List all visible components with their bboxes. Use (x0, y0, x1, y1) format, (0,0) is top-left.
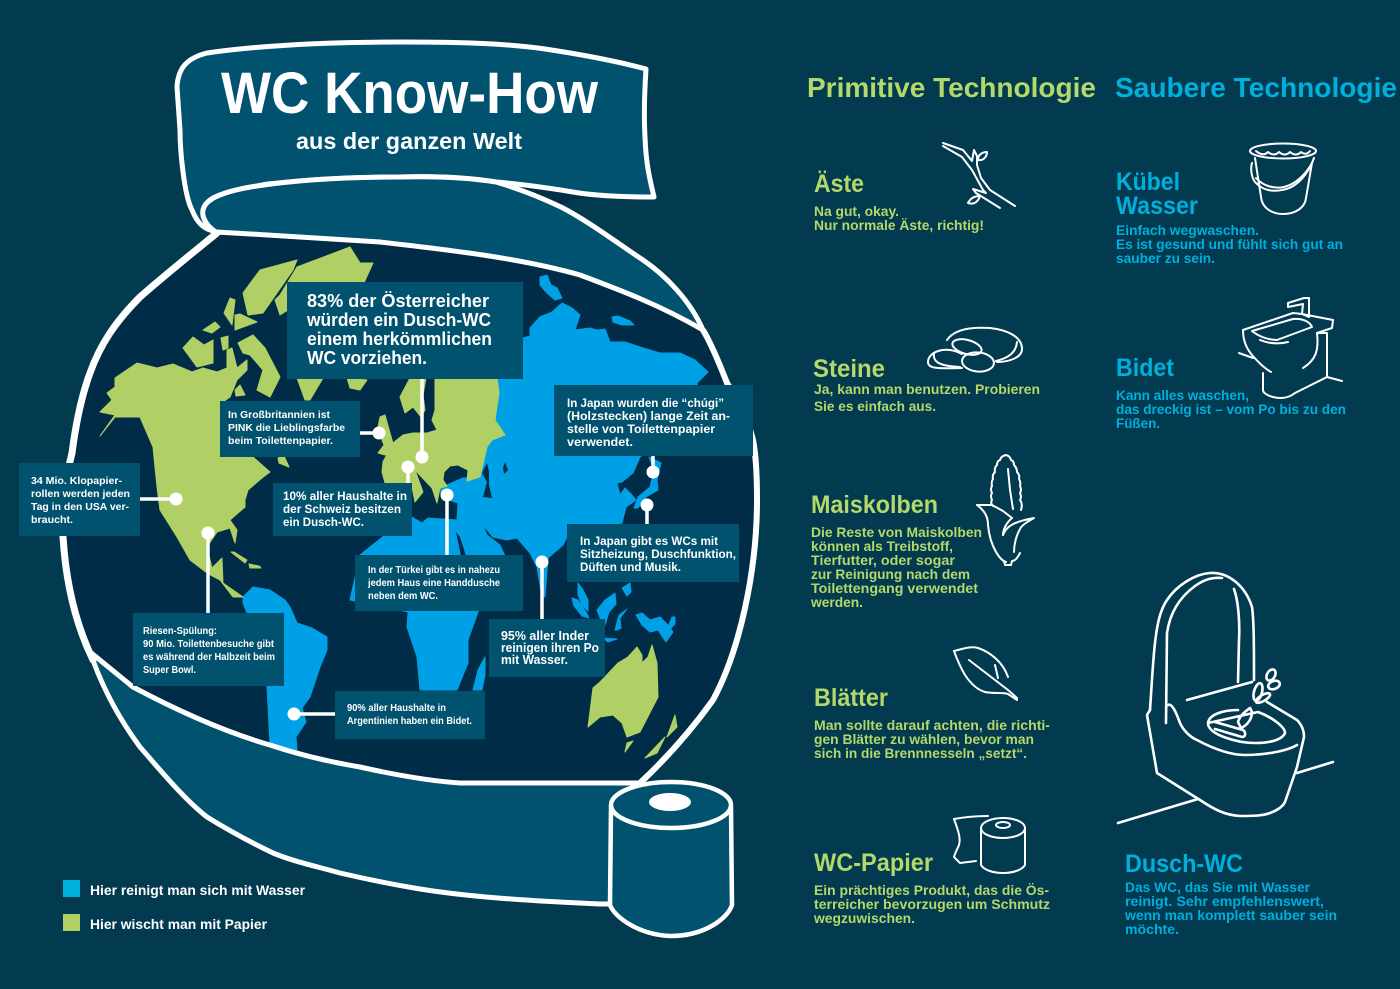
panel: Blätter: Man sollte darauf achten, die richti- (814, 717, 1050, 733)
connector lines and dots (140, 379, 660, 720)
callout: Super Bowl: Super Bowl. (143, 665, 196, 676)
continents: inland seas (456, 462, 508, 556)
panel: Blätter (814, 647, 1050, 761)
panel: Kübel Wasser: Es ist gesund und fühlt sich gut an (1116, 236, 1343, 252)
legend: Hier reinigt man sich mit Wasser (90, 882, 306, 898)
heading: Saubere Technologie: Saubere Technologie (1115, 72, 1397, 103)
panel: Kübel Wasser (1116, 144, 1343, 266)
callout: Super Bowl (133, 613, 284, 686)
callout: Österreich (287, 282, 523, 379)
panel: Bidet: Bidet (1116, 354, 1175, 382)
panel: Blätter: sich in die Brennnesseln „setzt“. (814, 745, 1027, 761)
panel: Bidet: Füßen. (1116, 415, 1160, 431)
callout: Großbritannien (220, 401, 360, 457)
callout: Türkei: neben dem WC. (368, 591, 438, 602)
globe map (63, 233, 757, 783)
panel: Dusch-WC: Dusch-WC (1125, 850, 1243, 878)
globe outline right (640, 330, 757, 783)
callout: Österreich: würden ein Dusch-WC (306, 310, 491, 330)
panel: Maiskolben: werden. (810, 594, 863, 610)
icon: bucket (1250, 144, 1316, 214)
callout: Großbritannien: beim Toilettenpapier. (228, 435, 333, 447)
panel: WC-Papier: WC-Papier (814, 849, 933, 877)
banner shadow (496, 182, 614, 205)
callout: USA: rollen werden jeden (31, 488, 130, 500)
panel: Dusch-WC: reinigt. Sehr empfehlenswert, (1125, 893, 1324, 909)
callout: Österreich: WC vorziehen. (307, 348, 427, 368)
callout: USA: Tag in den USA ver- (31, 501, 129, 513)
continents: water regions (243, 275, 708, 750)
panel: Äste: Äste (814, 170, 864, 198)
panel: Dusch-WC: Das WC, das Sie mit Wasser (1125, 879, 1311, 895)
panel: WC-Papier: Ein prächtiges Produkt, das die Ös- (814, 882, 1049, 898)
panel: Dusch-WC: wenn man komplett sauber sein (1124, 907, 1337, 923)
panel: WC-Papier: wegzuwischen. (813, 910, 915, 926)
callout: Indien: 95% aller Inder (501, 629, 589, 643)
callout: Argentinien (335, 691, 485, 739)
panel: Dusch-WC (1118, 573, 1337, 937)
panel: Kübel Wasser: Einfach wegwaschen. (1116, 222, 1259, 238)
panel: WC-Papier (813, 816, 1050, 926)
panel: Steine: Steine (813, 355, 885, 383)
panel: Kübel Wasser: Kübel (1116, 168, 1180, 196)
callout: Japan chúgi: In Japan wurden die “chúgi” (567, 396, 724, 410)
panel: Dusch-WC: möchte. (1125, 921, 1179, 937)
panel: Bidet: das dreckig ist – vom Po bis zu den (1116, 401, 1346, 417)
panel: Bidet: Kann alles waschen, (1116, 387, 1249, 403)
callout: Japan chúgi: (Holzstecken) lange Zeit an- (567, 409, 730, 423)
callout: Österreich: 83% der Österreicher (307, 291, 489, 311)
callout: Japan WCs (567, 524, 739, 582)
callout: Argentinien: 90% aller Haushalte in (347, 703, 446, 714)
icon: corn (977, 455, 1034, 565)
panel: Steine: Ja, kann man benutzen. Probieren (814, 381, 1040, 397)
panel: Maiskolben (810, 455, 1034, 610)
callout: Super Bowl: es während der Halbzeit beim (143, 652, 275, 663)
callout: Japan chúgi (554, 385, 753, 456)
icon: paper roll (954, 816, 1025, 873)
callout: Indien: mit Wasser. (501, 653, 568, 667)
callout: Österreich: einem herkömmlichen (307, 329, 492, 349)
callout: Türkei: In der Türkei gibt es in nahezu (368, 565, 500, 576)
icon: bidet (1239, 298, 1342, 398)
panel: Steine: Sie es einfach aus. (814, 398, 936, 414)
callout: Schweiz: der Schweiz besitzen (283, 502, 401, 516)
callout: Schweiz (273, 483, 412, 536)
callout: Türkei: jedem Haus eine Handdusche (367, 578, 501, 589)
panel: Bidet (1116, 298, 1346, 431)
panel: Blätter: Blätter (814, 684, 888, 712)
callout: USA (19, 463, 140, 536)
callout: Japan WCs: In Japan gibt es WCs mit (580, 534, 718, 548)
panel: Äste: Na gut, okay. (814, 203, 899, 219)
icon: branch (943, 143, 1015, 208)
panel: Maiskolben: können als Treibstoff, (811, 538, 953, 554)
panel: Äste (814, 143, 1015, 233)
panel: Maiskolben: Tierfutter, oder sogar (811, 552, 956, 568)
icon: shower toilet (1118, 573, 1333, 823)
callout: Super Bowl: 90 Mio. Toilettenbesuche gibt (143, 639, 275, 650)
callout: Japan chúgi: stelle von Toilettenpapier (567, 422, 715, 436)
panel: WC-Papier: terreicher bevorzugen um Schmutz (814, 896, 1050, 912)
callout: Super Bowl: Riesen-Spülung: (143, 626, 217, 637)
callout: USA: 34 Mio. Klopapier- (31, 475, 122, 487)
callout: Großbritannien: PINK die Lieblingsfarbe (228, 422, 345, 434)
heading: Primitive Technologie: Primitive Technologie (807, 72, 1096, 103)
panel: Äste: Nur normale Äste, richtig! (814, 217, 984, 233)
callout: Japan WCs: Düften und Musik. (580, 560, 681, 574)
panel: Kübel Wasser: sauber zu sein. (1116, 250, 1215, 266)
toilet paper roll (610, 782, 732, 936)
panel: Steine (813, 328, 1040, 414)
title: WC Know-How (221, 61, 599, 126)
panel: Maiskolben: Maiskolben (811, 491, 938, 519)
panel: Blätter: gen Blätter zu wählen, bevor man (814, 731, 1034, 747)
subtitle: aus der ganzen Welt (296, 128, 522, 154)
callout: Argentinien: Argentinien haben ein Bidet. (347, 716, 472, 727)
globe disc (63, 233, 757, 783)
callout: USA: braucht. (31, 514, 73, 526)
icon: leaf (954, 647, 1017, 700)
callout: Indien (489, 619, 605, 677)
callout: Türkei (355, 555, 523, 611)
title banner (177, 42, 654, 232)
legend (63, 880, 306, 932)
callout: Schweiz: 10% aller Haushalte in (283, 489, 407, 503)
lower ribbon band (90, 652, 640, 904)
globe outline left (63, 233, 217, 660)
callout: Japan chúgi: verwendet. (567, 435, 633, 449)
callout: Schweiz: ein Dusch-WC. (283, 515, 364, 529)
callout: Japan WCs: Sitzheizung, Duschfunktion, (580, 547, 736, 561)
callout: Indien: reinigen ihren Po (501, 641, 599, 655)
legend: Hier wischt man mit Papier (90, 916, 268, 932)
panel: Kübel Wasser: Wasser (1116, 192, 1198, 220)
panel: Maiskolben: zur Reinigung nach dem (811, 566, 970, 582)
icon: stones (928, 328, 1022, 373)
continents: paper regions (100, 247, 677, 758)
callout: Großbritannien: In Großbritannien ist (228, 409, 330, 421)
upper ribbon band (203, 177, 703, 330)
panel: Maiskolben: Die Reste von Maiskolben (811, 524, 982, 540)
panel: Maiskolben: Toilettengang verwendet (811, 580, 978, 596)
